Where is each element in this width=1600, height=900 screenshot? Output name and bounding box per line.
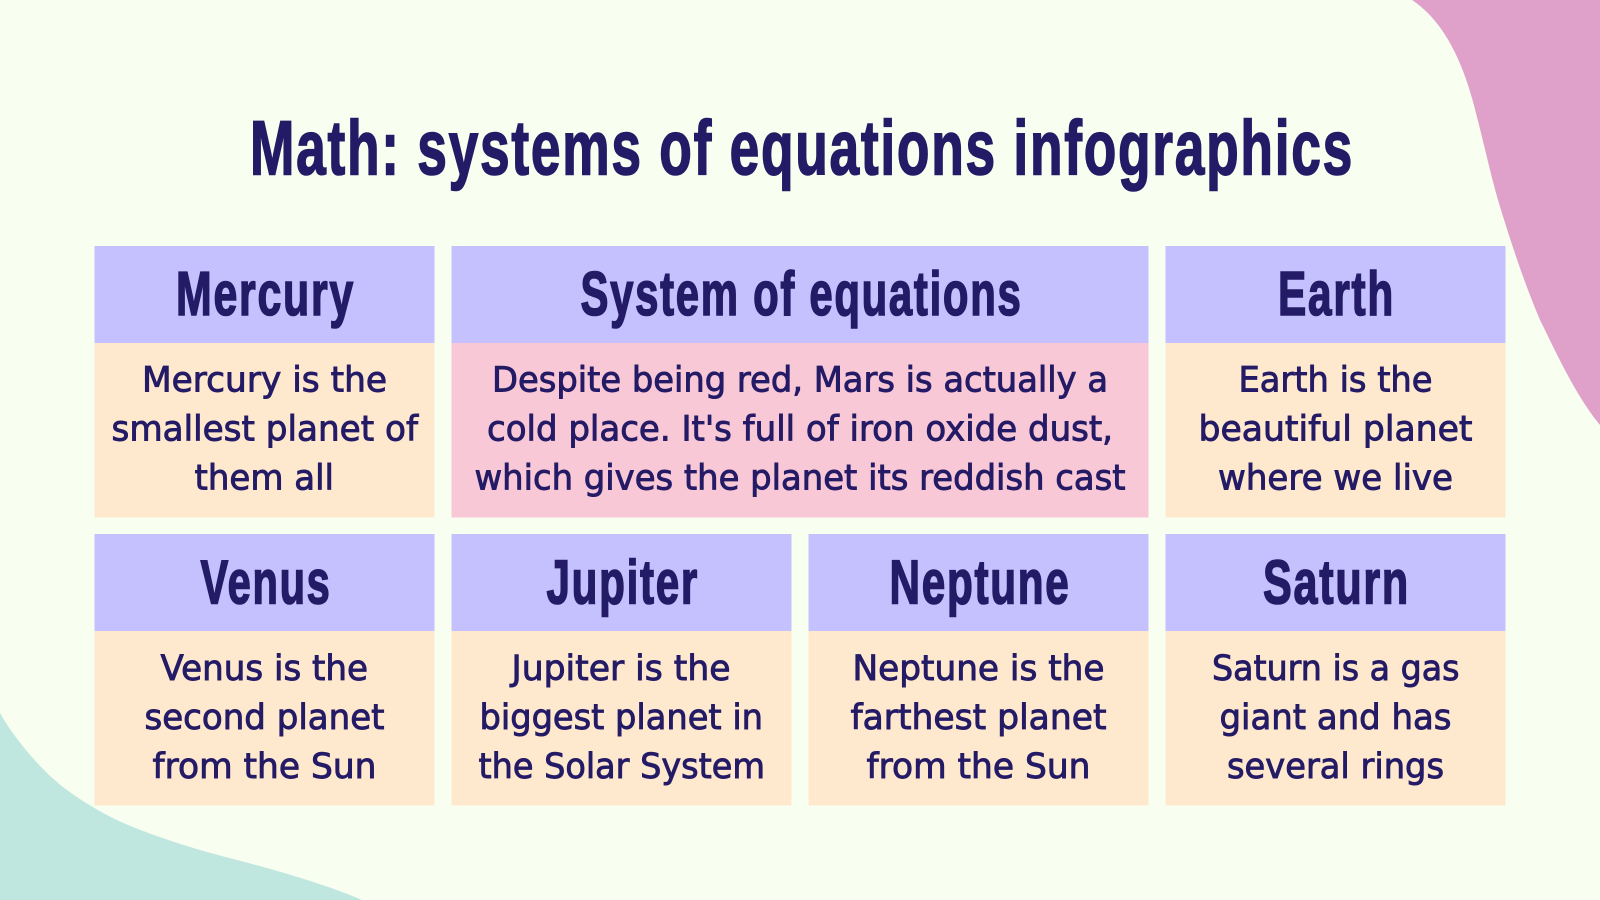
description: System of equations: Despite being red, Mars is actually a	[492, 360, 1108, 400]
heading: Neptune: Neptune	[890, 548, 1070, 618]
heading: Earth: Earth	[1278, 260, 1395, 329]
description: System of equations	[474, 360, 1126, 498]
decorative blob: pink top right	[1412, 0, 1600, 425]
description: Mercury: smallest planet of	[112, 410, 419, 450]
header band: Earth	[1166, 246, 1506, 343]
panel: System of equations	[452, 246, 1148, 518]
description: Saturn: Saturn is a gas	[1212, 649, 1460, 689]
description: Jupiter	[478, 649, 765, 787]
header band: Mercury	[94, 246, 434, 343]
description: Earth: beautiful planet	[1198, 410, 1472, 450]
description: System of equations: which gives the planet its reddish cast	[474, 458, 1126, 498]
description: Mercury	[112, 360, 419, 498]
panel: Jupiter	[452, 534, 792, 806]
description: Earth: Earth is the	[1238, 360, 1432, 400]
description: System of equations: cold place. It's full of iron oxide dust,	[487, 410, 1113, 450]
heading: Mercury: Mercury	[176, 260, 355, 329]
decorative blob: teal bottom left	[0, 713, 362, 900]
panel: Neptune	[808, 534, 1148, 806]
body band: Neptune	[808, 631, 1148, 806]
panel: Earth	[1166, 246, 1506, 518]
header band: Jupiter	[452, 534, 792, 631]
header band: Saturn	[1166, 534, 1506, 631]
heading: Saturn: Saturn	[1263, 548, 1410, 618]
description: Mercury: Mercury is the	[142, 360, 387, 400]
description: Jupiter: the Solar System	[478, 747, 765, 787]
body band: Earth	[1166, 343, 1506, 518]
header band: Venus	[94, 534, 434, 631]
description: Earth	[1198, 360, 1472, 498]
heading: Jupiter: Jupiter	[546, 548, 699, 618]
description: Neptune	[850, 649, 1106, 787]
body band: Jupiter	[452, 631, 792, 806]
description: Saturn	[1212, 649, 1460, 787]
description: Jupiter: biggest planet in	[480, 698, 763, 738]
description: Neptune: from the Sun	[866, 747, 1090, 787]
heading: System of equations: System of equations	[580, 260, 1022, 329]
header band: System of equations	[452, 246, 1148, 343]
description: Venus: Venus is the	[160, 649, 368, 689]
description: Saturn: several rings	[1227, 747, 1444, 787]
body band: Mercury	[94, 343, 434, 518]
heading: Venus: Venus	[200, 548, 332, 618]
panel: Mercury	[94, 246, 434, 518]
panel: Venus	[94, 534, 434, 806]
description: Venus	[144, 649, 384, 787]
body band: Venus	[94, 631, 434, 806]
description: Venus: second planet	[144, 698, 384, 738]
description: Neptune: farthest planet	[850, 698, 1106, 738]
body band: System of equations	[452, 343, 1148, 518]
description: Saturn: giant and has	[1220, 698, 1452, 738]
header band: Neptune	[808, 534, 1148, 631]
description: Mercury: them all	[194, 458, 334, 498]
description: Venus: from the Sun	[152, 747, 376, 787]
description: Neptune: Neptune is the	[852, 649, 1104, 689]
panel: Saturn	[1166, 534, 1506, 806]
description: Earth: where we live	[1218, 458, 1453, 498]
body band: Saturn	[1166, 631, 1506, 806]
description: Jupiter: Jupiter is the	[510, 649, 730, 689]
